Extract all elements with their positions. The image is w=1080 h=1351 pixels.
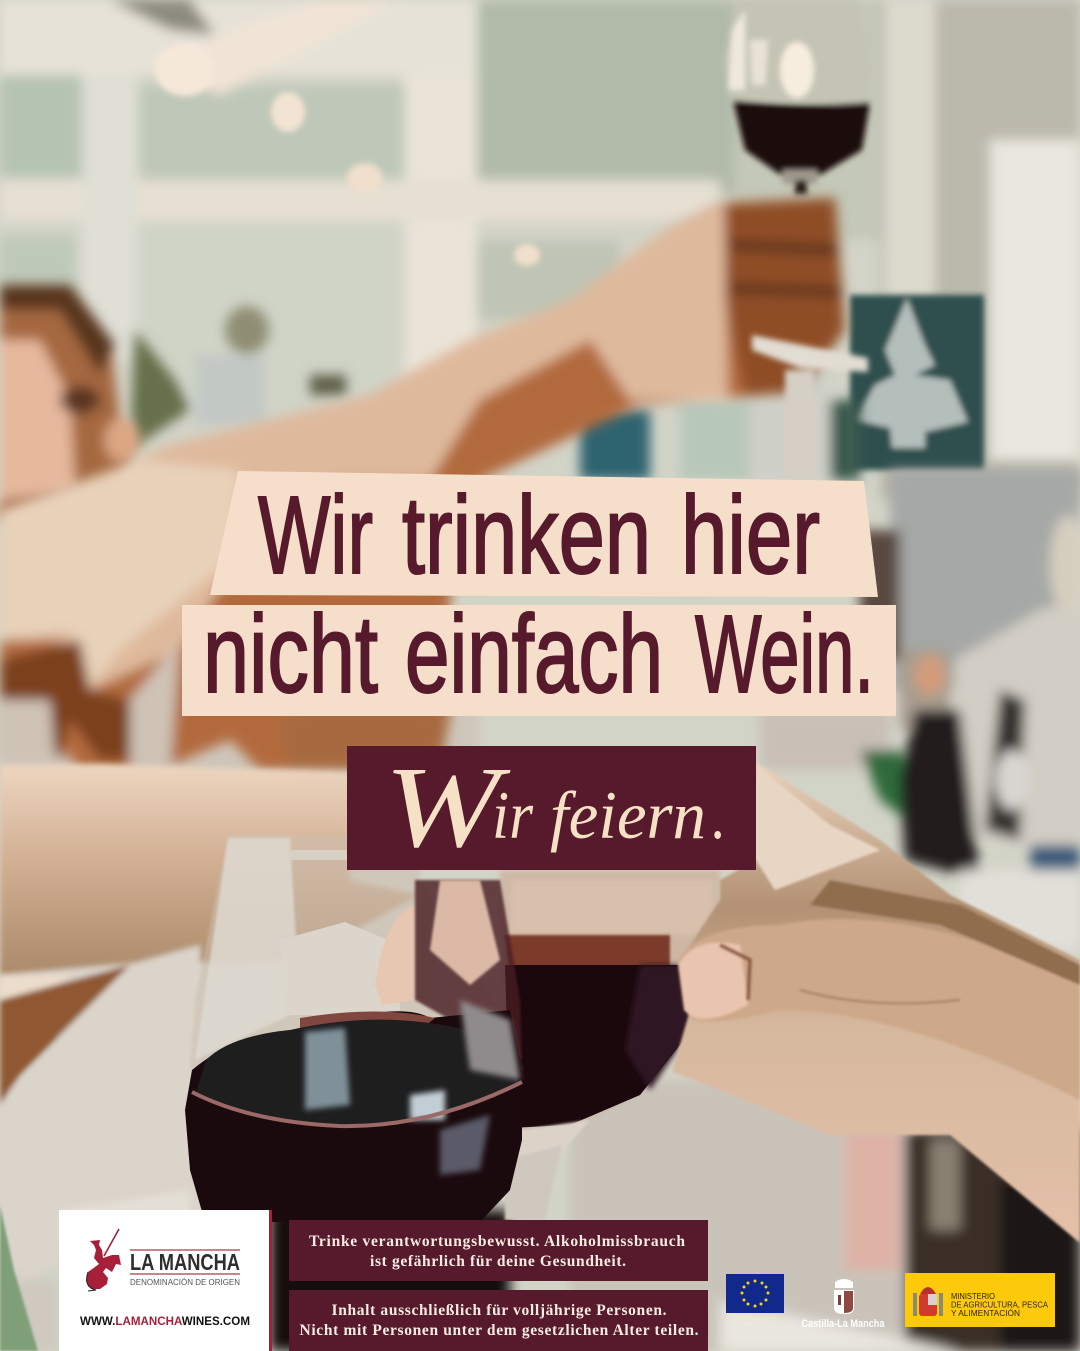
logo: European Union flag: Unión Europea (738, 1322, 772, 1328)
logo: Castilla-La Mancha (802, 1279, 885, 1330)
script tagline box (347, 744, 756, 872)
lower left arm (0, 764, 420, 1300)
headline line 1 text: hier (681, 474, 820, 597)
website url: WWW.LAMANCHAWINES.COM (80, 1316, 250, 1328)
disclaimer box: responsible drinking: ist gefährlich für deine Gesundheit. (370, 1253, 626, 1270)
logo: Spanish ministry: DE AGRICULTURA, PESCA (951, 1300, 1049, 1310)
person at left (0, 285, 140, 520)
bokeh lights (155, 44, 540, 266)
upper background objects (130, 306, 860, 480)
headline line 2 text (203, 593, 874, 716)
script tagline text: . (712, 777, 726, 853)
disclaimer box: adults only: Inhalt ausschließlich für volljährige Personen. (332, 1302, 667, 1319)
hand holding the glass (672, 762, 1080, 1243)
rear wine glass (500, 870, 720, 1220)
lower middle tablecloth and back (0, 1080, 1080, 1351)
headline line 2 text: einfach (405, 593, 663, 716)
green bottle neck bottom left (0, 1205, 38, 1351)
icon: Don Quixote rider emblem (86, 1229, 121, 1291)
disclaimer box: adults only (289, 1290, 708, 1351)
script tagline text (384, 744, 726, 872)
headline line 1 text: trinken (402, 474, 651, 597)
script tagline text: W (384, 744, 511, 872)
logo: Castilla-La Mancha: Castilla-La Mancha (802, 1318, 885, 1330)
disclaimer box: responsible drinking (289, 1220, 708, 1281)
headline line 1 text (258, 474, 820, 597)
logo: European Union flag (726, 1274, 784, 1328)
window panes and frames (0, 0, 1080, 500)
headline line 1 text: Wir (258, 474, 373, 597)
top glass foot (752, 335, 868, 480)
top wine glass (724, 0, 872, 194)
logo wordmark: LA MANCHA (130, 1249, 240, 1275)
logo wordmark: DENOMINACIÓN DE ORIGEN (130, 1278, 240, 1287)
headline line 2 text: nicht (203, 593, 378, 716)
disclaimer box: adults only: Nicht mit Personen unter dem gesetzlichen Alter teilen. (300, 1322, 699, 1339)
logo: Spanish ministry (905, 1273, 1055, 1327)
raised arm and hand holding the glass (0, 198, 845, 770)
logo: Spanish ministry: Y ALIMENTACIÓN (951, 1309, 1020, 1318)
script tagline text: ir (492, 777, 533, 853)
script tagline text: feiern (550, 777, 706, 853)
dark green sign (850, 295, 984, 470)
headline line 1 band (210, 471, 878, 597)
front wine glass (185, 835, 522, 1222)
logo wordmark (130, 1249, 240, 1287)
headline line 2 text: Wein. (695, 593, 874, 716)
disclaimer box: responsible drinking: Trinke verantwortungsbewusst. Alkoholmissbrauch (309, 1233, 685, 1250)
logo panel: La Mancha (59, 1210, 272, 1351)
right wall and background guests (0, 470, 1080, 950)
logo: Spanish ministry: MINISTERIO (951, 1292, 995, 1301)
logo: European Union flag: Cofinanciado por la (733, 1316, 777, 1322)
headline line 2 band (182, 593, 896, 716)
icon: coat of arms (913, 1287, 943, 1316)
